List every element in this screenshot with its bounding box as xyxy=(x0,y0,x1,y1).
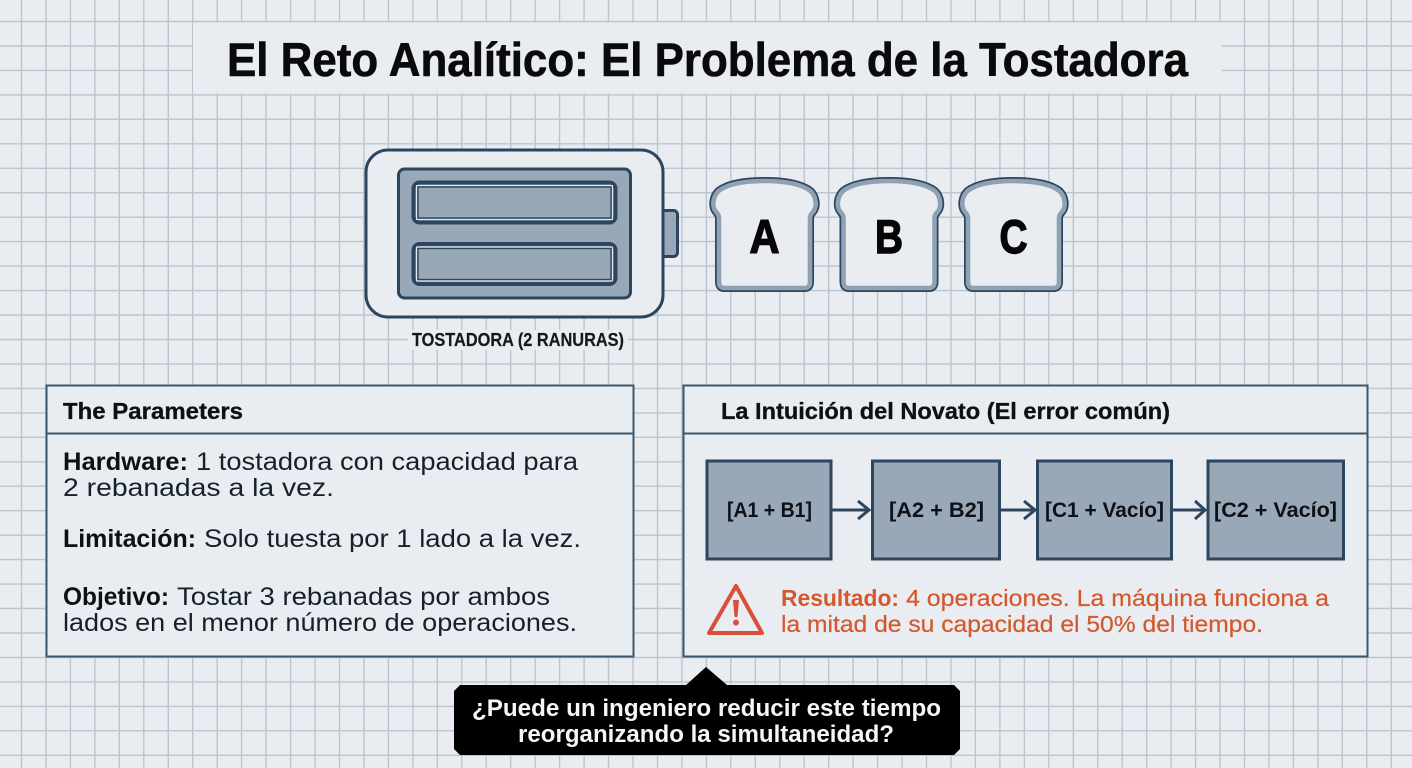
slot 2 xyxy=(414,244,616,284)
title: El Reto Analítico: El Problema de la Tostadora xyxy=(227,33,1189,86)
step 2 xyxy=(872,461,1000,559)
icon: bread slice A: A xyxy=(750,210,780,263)
limitation text xyxy=(63,525,581,553)
step 3 xyxy=(1038,461,1172,559)
icon: toaster xyxy=(366,150,678,317)
slot 1 xyxy=(414,182,616,222)
hardware text xyxy=(63,448,578,502)
callout xyxy=(454,667,960,755)
callout: reorganizando la simultaneidad? xyxy=(518,721,894,748)
toaster body xyxy=(366,150,663,317)
arrow 3 xyxy=(1172,501,1205,519)
novice heading: La Intuición del Novato (El error común) xyxy=(721,398,1170,424)
objective text xyxy=(63,583,577,637)
icon: bread slice A xyxy=(713,181,816,288)
step 3: [C1 + Vacío] xyxy=(1045,499,1164,522)
step 2: [A2 + B2] xyxy=(889,499,984,522)
step 4 xyxy=(1208,461,1344,559)
result text: la mitad de su capacidad el 50% del tiempo. xyxy=(781,611,1263,637)
callout: ¿Puede un ingeniero reducir este tiempo xyxy=(472,695,941,722)
arrow 1 xyxy=(832,501,869,519)
objective text: Objetivo: xyxy=(63,583,169,611)
parameters heading: The Parameters xyxy=(63,398,243,424)
icon: bread slice B xyxy=(838,181,940,288)
result text: 4 operaciones. La máquina funciona a xyxy=(906,585,1329,611)
result text xyxy=(781,585,1329,637)
objective text: Tostar 3 rebanadas por ambos xyxy=(177,583,550,611)
hardware text: 1 tostadora con capacidad para xyxy=(196,448,578,476)
step 4: [C2 + Vacío] xyxy=(1214,499,1337,522)
limitation text: Solo tuesta por 1 lado a la vez. xyxy=(204,525,581,553)
icon: bread slice C xyxy=(962,181,1065,288)
step 1: [A1 + B1] xyxy=(727,499,812,522)
icon: bread slice B: B xyxy=(875,210,903,263)
step 1 xyxy=(707,461,831,559)
toaster label: TOSTADORA (2 RANURAS) xyxy=(412,330,624,350)
arrow 2 xyxy=(1000,501,1035,519)
panel: la intuición del novato xyxy=(684,386,1368,656)
hardware text: 2 rebanadas a la vez. xyxy=(63,474,334,502)
objective text: lados en el menor número de operaciones. xyxy=(63,609,577,637)
limitation text: Limitación: xyxy=(63,525,196,553)
panel: the parameters xyxy=(46,386,634,656)
icon: warning triangle xyxy=(709,586,762,633)
hardware text: Hardware: xyxy=(63,448,188,476)
toaster knob xyxy=(660,210,678,256)
result text: Resultado: xyxy=(781,585,899,611)
icon: bread slice C: C xyxy=(1000,210,1028,263)
toaster top plate xyxy=(398,169,630,298)
